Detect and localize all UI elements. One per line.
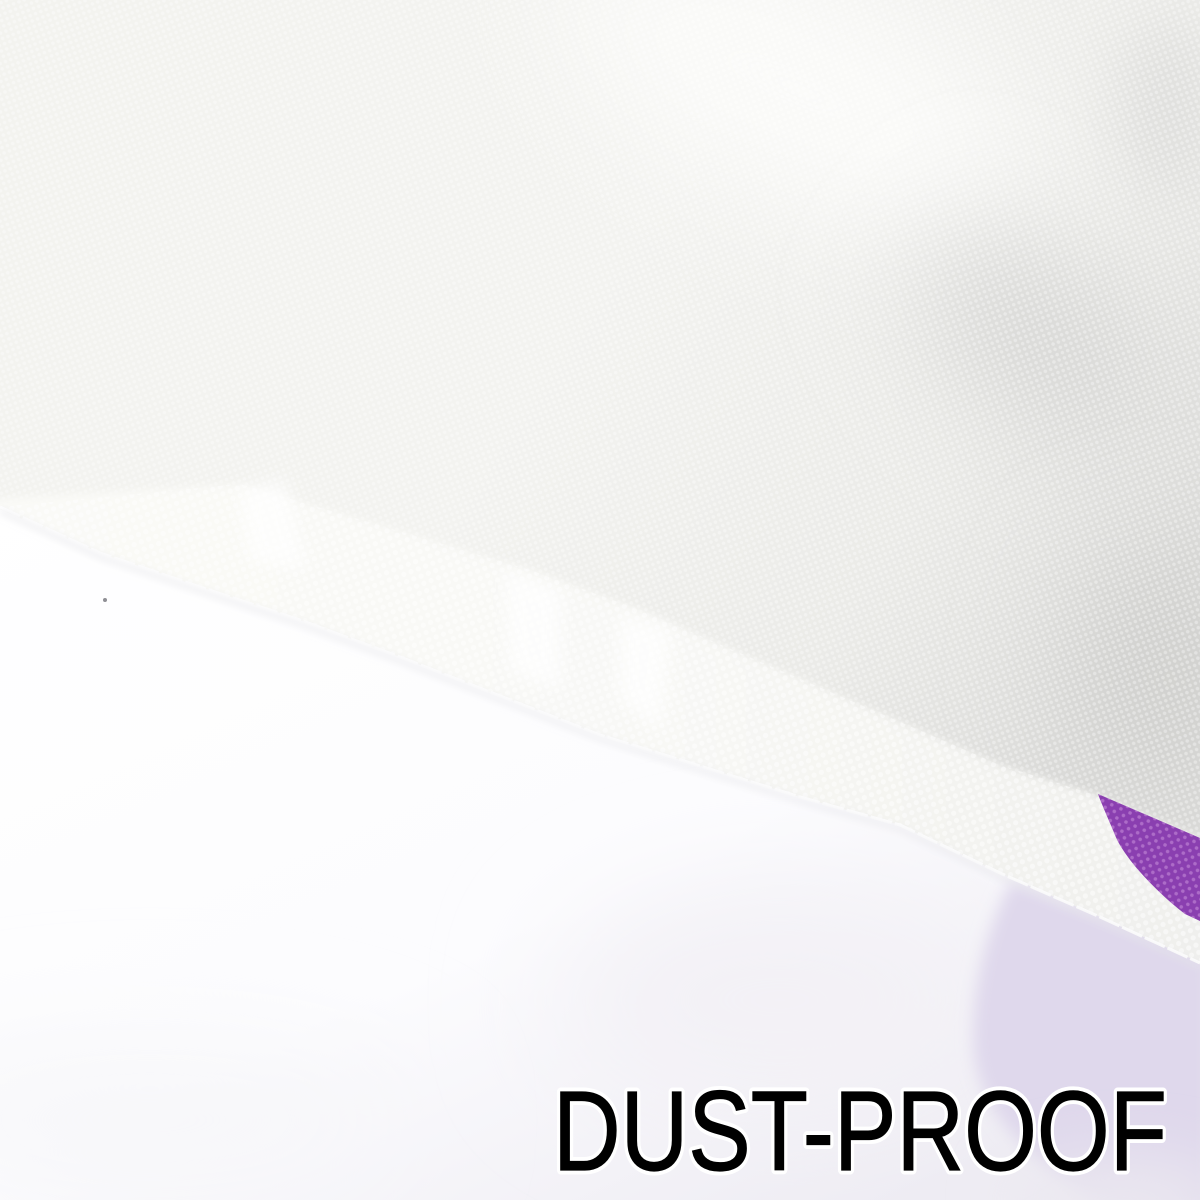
lilac printed shape — [973, 880, 1200, 1200]
hem band along the seam — [0, 480, 1200, 990]
purple printed wedge — [1098, 794, 1200, 921]
lower white fabric panel — [0, 568, 1200, 1200]
fold highlights — [240, 480, 670, 730]
stitching line — [0, 507, 1200, 963]
